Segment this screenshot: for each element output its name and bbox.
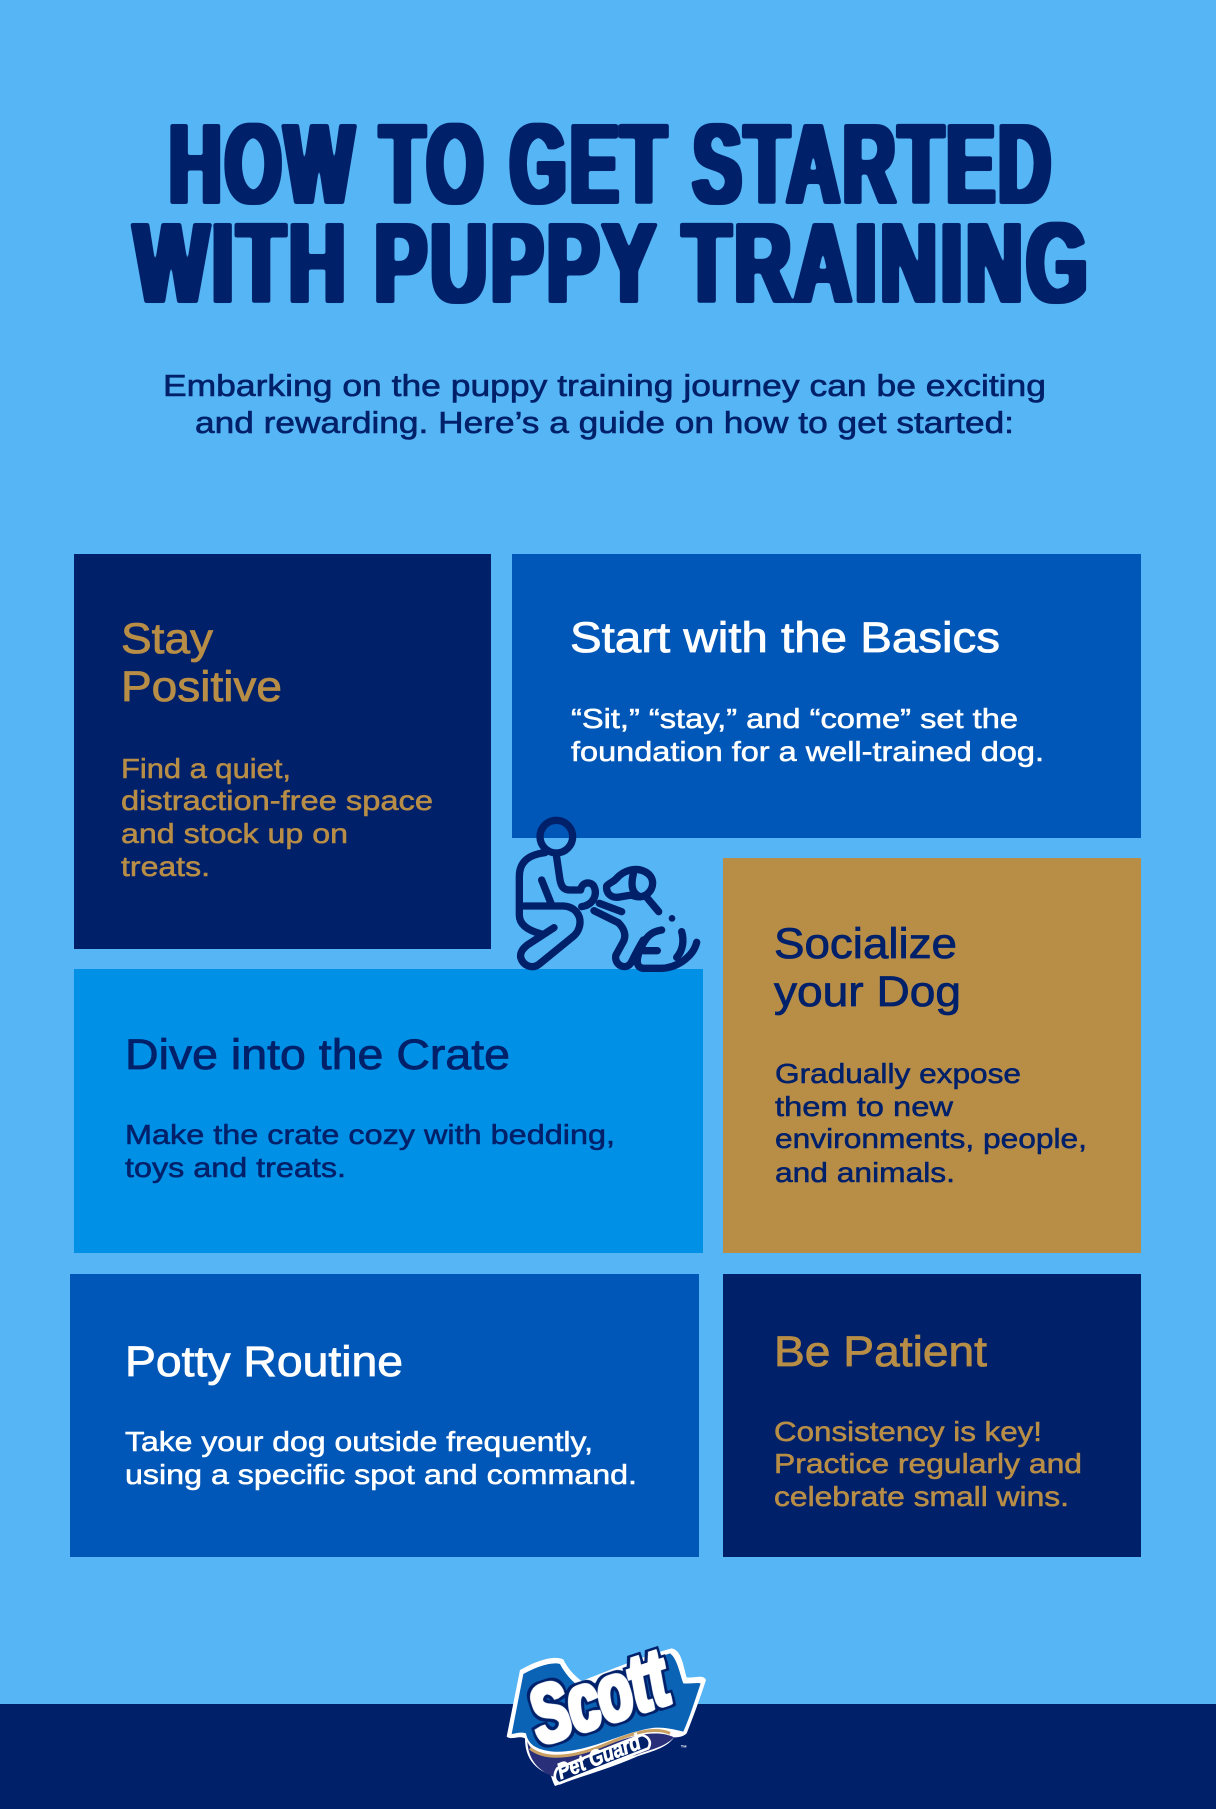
- body: stay positive: Find a quiet,: [121, 753, 291, 784]
- heading: socialize your dog: [774, 920, 961, 1016]
- heading: be patient: Be Patient: [774, 1328, 987, 1376]
- logo: Scott Pet Guard: Pet Guard: [553, 1728, 645, 1784]
- body: be patient: Consistency is key!: [774, 1416, 1042, 1447]
- heading: start with the basics: Start with the Basics: [570, 614, 1000, 662]
- body: socialize your dog: them to new: [775, 1091, 953, 1122]
- intro text: and rewarding. Here’s a guide on how to get started:: [195, 406, 1014, 440]
- body: start with the basics: [571, 703, 1044, 767]
- panel: stay positive: [74, 554, 491, 949]
- body: potty routine: Take your dog outside frequently,: [125, 1426, 593, 1457]
- body: stay positive: treats.: [121, 851, 210, 882]
- title: [134, 101, 1091, 326]
- heading: stay positive: Stay: [121, 615, 214, 663]
- body: be patient: celebrate small wins.: [774, 1481, 1069, 1512]
- panel: potty routine: [70, 1274, 699, 1557]
- panel: dive into the crate: [74, 969, 703, 1253]
- body: be patient: Practice regularly and: [774, 1448, 1082, 1479]
- body: stay positive: [121, 753, 433, 882]
- body: socialize your dog: [775, 1058, 1087, 1188]
- body: socialize your dog: Gradually expose: [775, 1058, 1021, 1089]
- body: potty routine: [125, 1426, 637, 1490]
- logo: Scott Pet Guard: [507, 1632, 706, 1786]
- heading: socialize your dog: Socialize: [774, 920, 957, 968]
- heading: socialize your dog: your Dog: [774, 968, 961, 1016]
- body: be patient: [774, 1416, 1082, 1512]
- footer band: [0, 1704, 1216, 1809]
- logo: Scott Pet Guard: ™: [681, 1745, 687, 1752]
- intro text: Embarking on the puppy training journey can be exciting: [163, 369, 1046, 403]
- body: stay positive: distraction-free space: [121, 785, 433, 816]
- heading: potty routine: Potty Routine: [125, 1338, 403, 1386]
- heading: dive into the crate: Dive into the Crate: [125, 1031, 510, 1079]
- body: potty routine: using a specific spot and command.: [125, 1459, 637, 1490]
- logo: Scott Pet Guard: Scott: [518, 1632, 681, 1762]
- heading: stay positive: Positive: [121, 663, 282, 711]
- icon: person training a dog: [519, 820, 697, 968]
- body: socialize your dog: and animals.: [775, 1157, 955, 1188]
- body: socialize your dog: environments, people,: [775, 1123, 1087, 1154]
- body: start with the basics: foundation for a well-trained dog.: [571, 736, 1044, 767]
- body: dive into the crate: Make the crate cozy with bedding,: [125, 1119, 615, 1150]
- heading: stay positive: [121, 615, 282, 711]
- body: start with the basics: “Sit,” “stay,” and “come” set the: [571, 703, 1018, 734]
- panel: socialize your dog: [723, 858, 1141, 1253]
- body: stay positive: and stock up on: [121, 818, 348, 849]
- panel: start with the basics: [512, 554, 1141, 838]
- body: dive into the crate: [125, 1119, 615, 1183]
- body: dive into the crate: toys and treats.: [125, 1152, 346, 1183]
- intro text: [163, 369, 1046, 440]
- panel: be patient: [723, 1274, 1141, 1557]
